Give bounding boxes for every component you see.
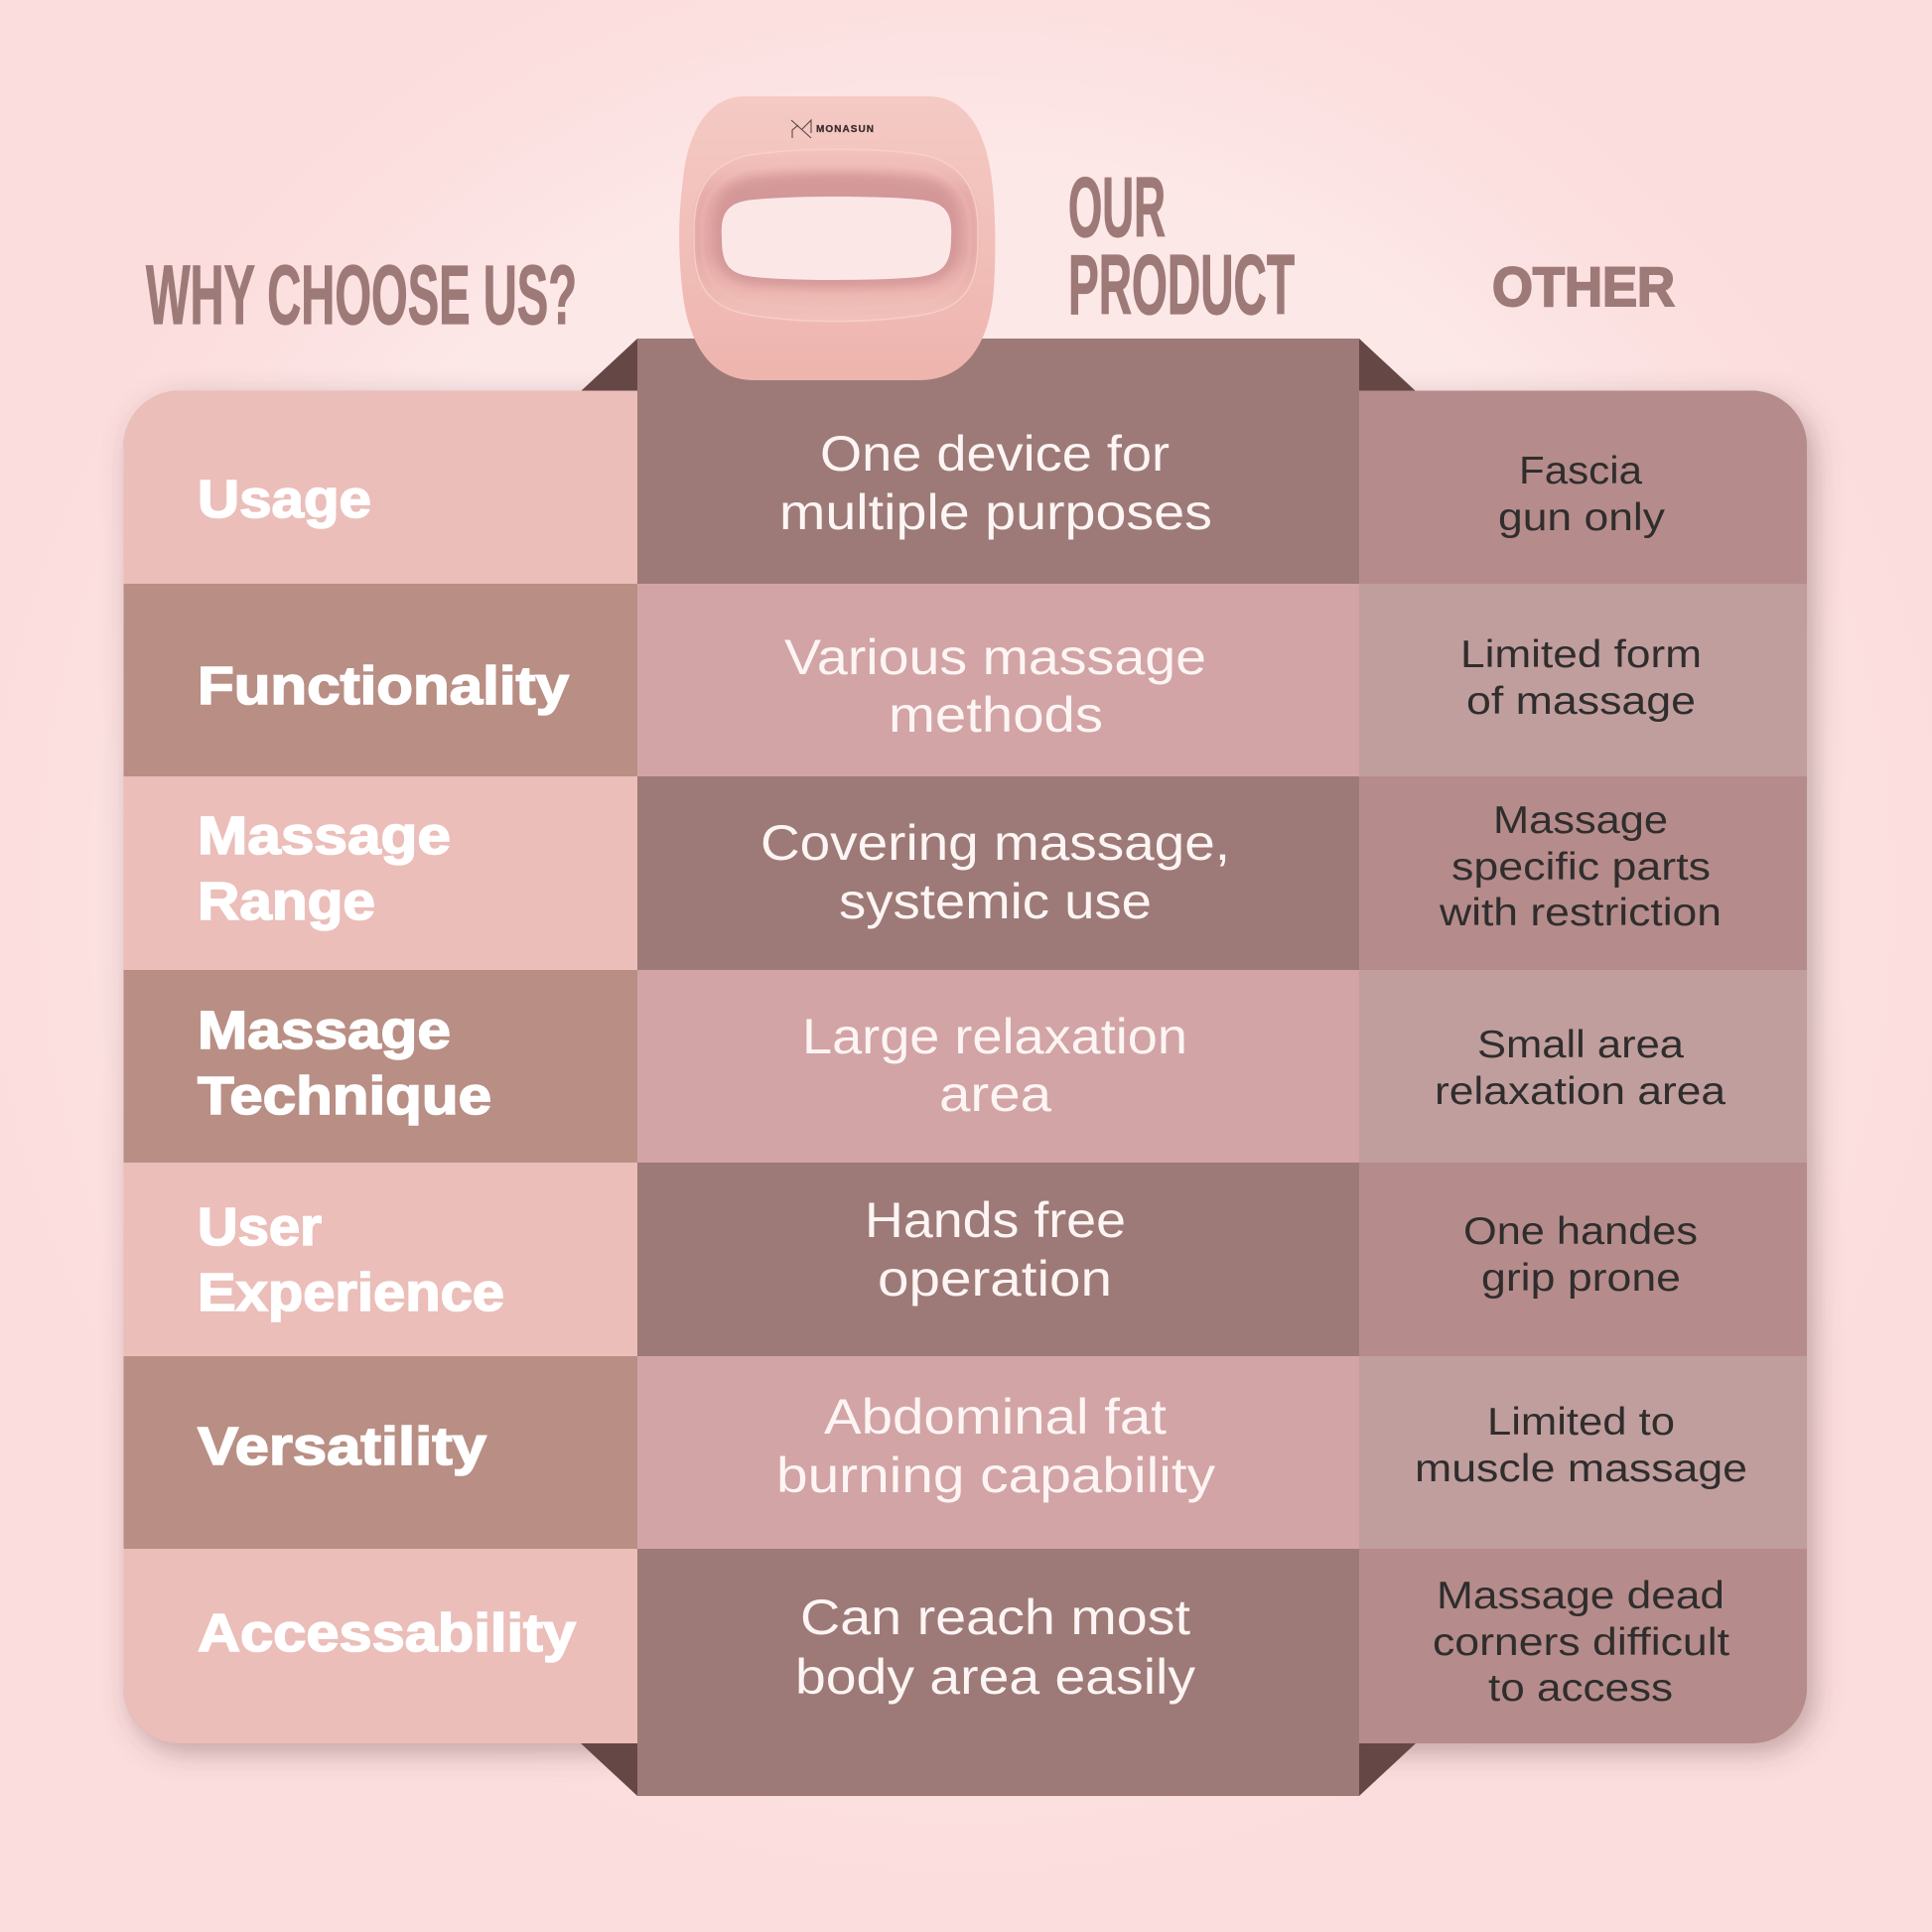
product: functionality	[784, 629, 1206, 743]
product logo: MONASUN	[816, 124, 874, 135]
other: massage range: Massage	[1493, 799, 1668, 842]
product: versatility	[776, 1389, 1215, 1503]
other: massage range: with restriction	[1439, 892, 1722, 934]
label: massage range	[198, 806, 451, 931]
product: accessability: Can reach most	[800, 1589, 1190, 1645]
product logo	[791, 120, 874, 138]
product: user experience: Hands free	[865, 1192, 1126, 1248]
label: massage technique: Technique	[198, 1066, 491, 1126]
other: functionality: of massage	[1466, 680, 1696, 723]
other: usage: gun only	[1498, 496, 1666, 539]
other: user experience: grip prone	[1481, 1257, 1681, 1300]
product: usage	[779, 426, 1212, 540]
our product text	[760, 426, 1230, 1705]
label: massage range: Massage	[198, 806, 451, 866]
comparison panel shadow	[123, 391, 1807, 1743]
column: our product	[637, 339, 1359, 1796]
other: accessability: Massage dead	[1437, 1575, 1725, 1617]
product: accessability: body area easily	[795, 1649, 1195, 1705]
other: accessability: to access	[1488, 1667, 1673, 1710]
other: massage range	[1439, 799, 1722, 934]
row labels	[198, 470, 576, 1663]
product: massage range	[760, 815, 1230, 929]
product: versatility: Abdominal fat	[824, 1389, 1167, 1445]
product: massage technique	[802, 1009, 1187, 1122]
label: massage range: Range	[198, 872, 375, 931]
product: versatility: burning capability	[776, 1448, 1215, 1503]
other: accessability: corners difficult	[1433, 1621, 1729, 1664]
column: other	[1359, 390, 1808, 1744]
other: versatility	[1415, 1401, 1747, 1490]
label: massage technique	[198, 1001, 491, 1126]
label: versatility: Versatility	[198, 1417, 486, 1476]
label: massage technique: Massage	[198, 1001, 451, 1060]
other: massage technique: Small area	[1477, 1024, 1685, 1066]
label: user experience	[198, 1197, 504, 1322]
other: user experience: One handes	[1463, 1210, 1698, 1253]
product hole	[722, 197, 951, 280]
product: massage technique: Large relaxation	[802, 1009, 1187, 1064]
other: massage range: specific parts	[1451, 846, 1711, 889]
label: accessability: Accessability	[198, 1603, 576, 1663]
product: user experience	[865, 1192, 1126, 1307]
heading: our product	[1068, 161, 1295, 333]
heading: our product: PRODUCT	[1068, 238, 1295, 333]
folded corners	[581, 339, 1416, 1796]
label: functionality: Functionality	[198, 656, 569, 716]
label: user experience: Experience	[198, 1263, 504, 1322]
other: massage technique: relaxation area	[1435, 1070, 1726, 1113]
other: accessability	[1433, 1575, 1729, 1710]
other: functionality	[1460, 633, 1702, 723]
other: usage: Fascia	[1519, 450, 1643, 492]
product: accessability	[795, 1589, 1195, 1705]
product: usage: multiple purposes	[779, 484, 1212, 540]
other text	[1415, 450, 1747, 1710]
other: functionality: Limited form	[1460, 633, 1702, 676]
heading: why choose us: WHY CHOOSE US?	[146, 248, 577, 342]
column: feature labels	[123, 390, 637, 1744]
product: massage range: Covering massage,	[760, 815, 1230, 871]
product: functionality: Various massage	[784, 629, 1206, 685]
product: usage: One device for	[820, 426, 1170, 482]
label: user experience: User	[198, 1197, 322, 1257]
product: massage technique: area	[939, 1066, 1051, 1122]
product: user experience: operation	[878, 1251, 1112, 1307]
label: usage: Usage	[198, 470, 371, 529]
product: functionality: methods	[889, 687, 1103, 743]
product image: massager	[679, 96, 995, 380]
heading: our product: OUR	[1068, 161, 1166, 255]
heading: other: OTHER	[1492, 255, 1675, 318]
other: massage technique	[1435, 1024, 1726, 1113]
other: user experience	[1463, 1210, 1698, 1300]
other: versatility: muscle massage	[1415, 1448, 1747, 1490]
other: usage	[1498, 450, 1666, 539]
other: versatility: Limited to	[1487, 1401, 1675, 1444]
product: massage range: systemic use	[839, 874, 1152, 929]
